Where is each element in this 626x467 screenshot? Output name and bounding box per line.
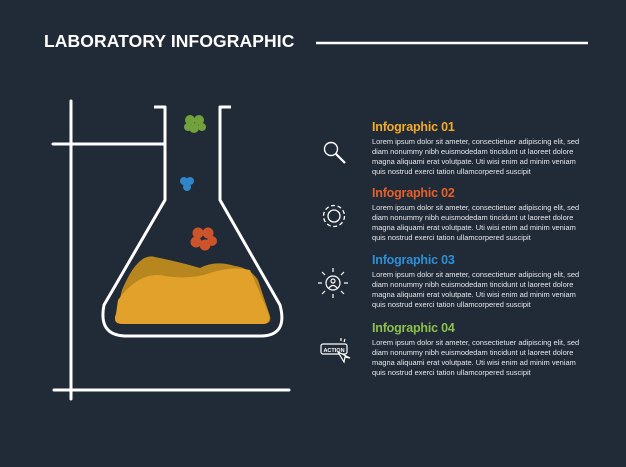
item 3: Infographic 03 bbox=[372, 253, 455, 267]
item 4: Infographic 04 bbox=[372, 321, 455, 335]
item 3: Lorem ipsum dolor sit ameter, consectietuer adipiscing elit, sed bbox=[372, 270, 579, 279]
item 3: quis nostrud exerci tation ullamcorpered suscipit bbox=[372, 300, 531, 309]
bubble orange bbox=[190, 228, 217, 250]
item 1: magna aliquami erat volutpate. Uti wisi enim ad minim veniam bbox=[372, 157, 576, 166]
item 4: Lorem ipsum dolor sit ameter, consectietuer adipiscing elit, sed bbox=[372, 338, 579, 347]
item 3 bbox=[372, 253, 579, 309]
stand bbox=[53, 101, 289, 399]
icon: magnifier bbox=[324, 142, 345, 163]
item 1: diam nonummy nibh euismodedam tincidunt ut laoreet dolore bbox=[372, 147, 573, 156]
item 1 bbox=[372, 120, 579, 176]
item 2: Infographic 02 bbox=[372, 186, 455, 200]
item 2: diam nonummy nibh euismodedam tincidunt ut laoreet dolore bbox=[372, 213, 573, 222]
item 1: Infographic 01 bbox=[372, 120, 455, 134]
flask bbox=[103, 107, 282, 336]
icon: gear bbox=[324, 206, 344, 226]
icon: action button bbox=[321, 338, 350, 362]
item 4: diam nonummy nibh euismodedam tincidunt ut laoreet dolore bbox=[372, 348, 573, 357]
icon: network bbox=[318, 268, 348, 298]
item 2: Lorem ipsum dolor sit ameter, consectietuer adipiscing elit, sed bbox=[372, 203, 579, 212]
icon: action button: ACTION bbox=[323, 348, 345, 354]
item 4 bbox=[372, 321, 579, 377]
item 3: diam nonummy nibh euismodedam tincidunt ut laoreet dolore bbox=[372, 280, 573, 289]
item 4: quis nostrud exerci tation ullamcorpered suscipit bbox=[372, 368, 531, 377]
title: LABORATORY INFOGRAPHIC bbox=[44, 31, 294, 51]
item 3: magna aliquami erat volutpate. Uti wisi enim ad minim veniam bbox=[372, 290, 576, 299]
title rule bbox=[316, 42, 588, 44]
liquid bbox=[115, 256, 270, 324]
bubble blue bbox=[180, 177, 194, 191]
bubble green bbox=[184, 115, 206, 133]
item 2: quis nostrud exerci tation ullamcorpered suscipit bbox=[372, 233, 531, 242]
item 1: quis nostrud exerci tation ullamcorpered suscipit bbox=[372, 167, 531, 176]
item 2: magna aliquami erat volutpate. Uti wisi enim ad minim veniam bbox=[372, 223, 576, 232]
item 2 bbox=[372, 186, 579, 242]
item 1: Lorem ipsum dolor sit ameter, consectietuer adipiscing elit, sed bbox=[372, 137, 579, 146]
item 4: magna aliquami erat volutpate. Uti wisi enim ad minim veniam bbox=[372, 358, 576, 367]
